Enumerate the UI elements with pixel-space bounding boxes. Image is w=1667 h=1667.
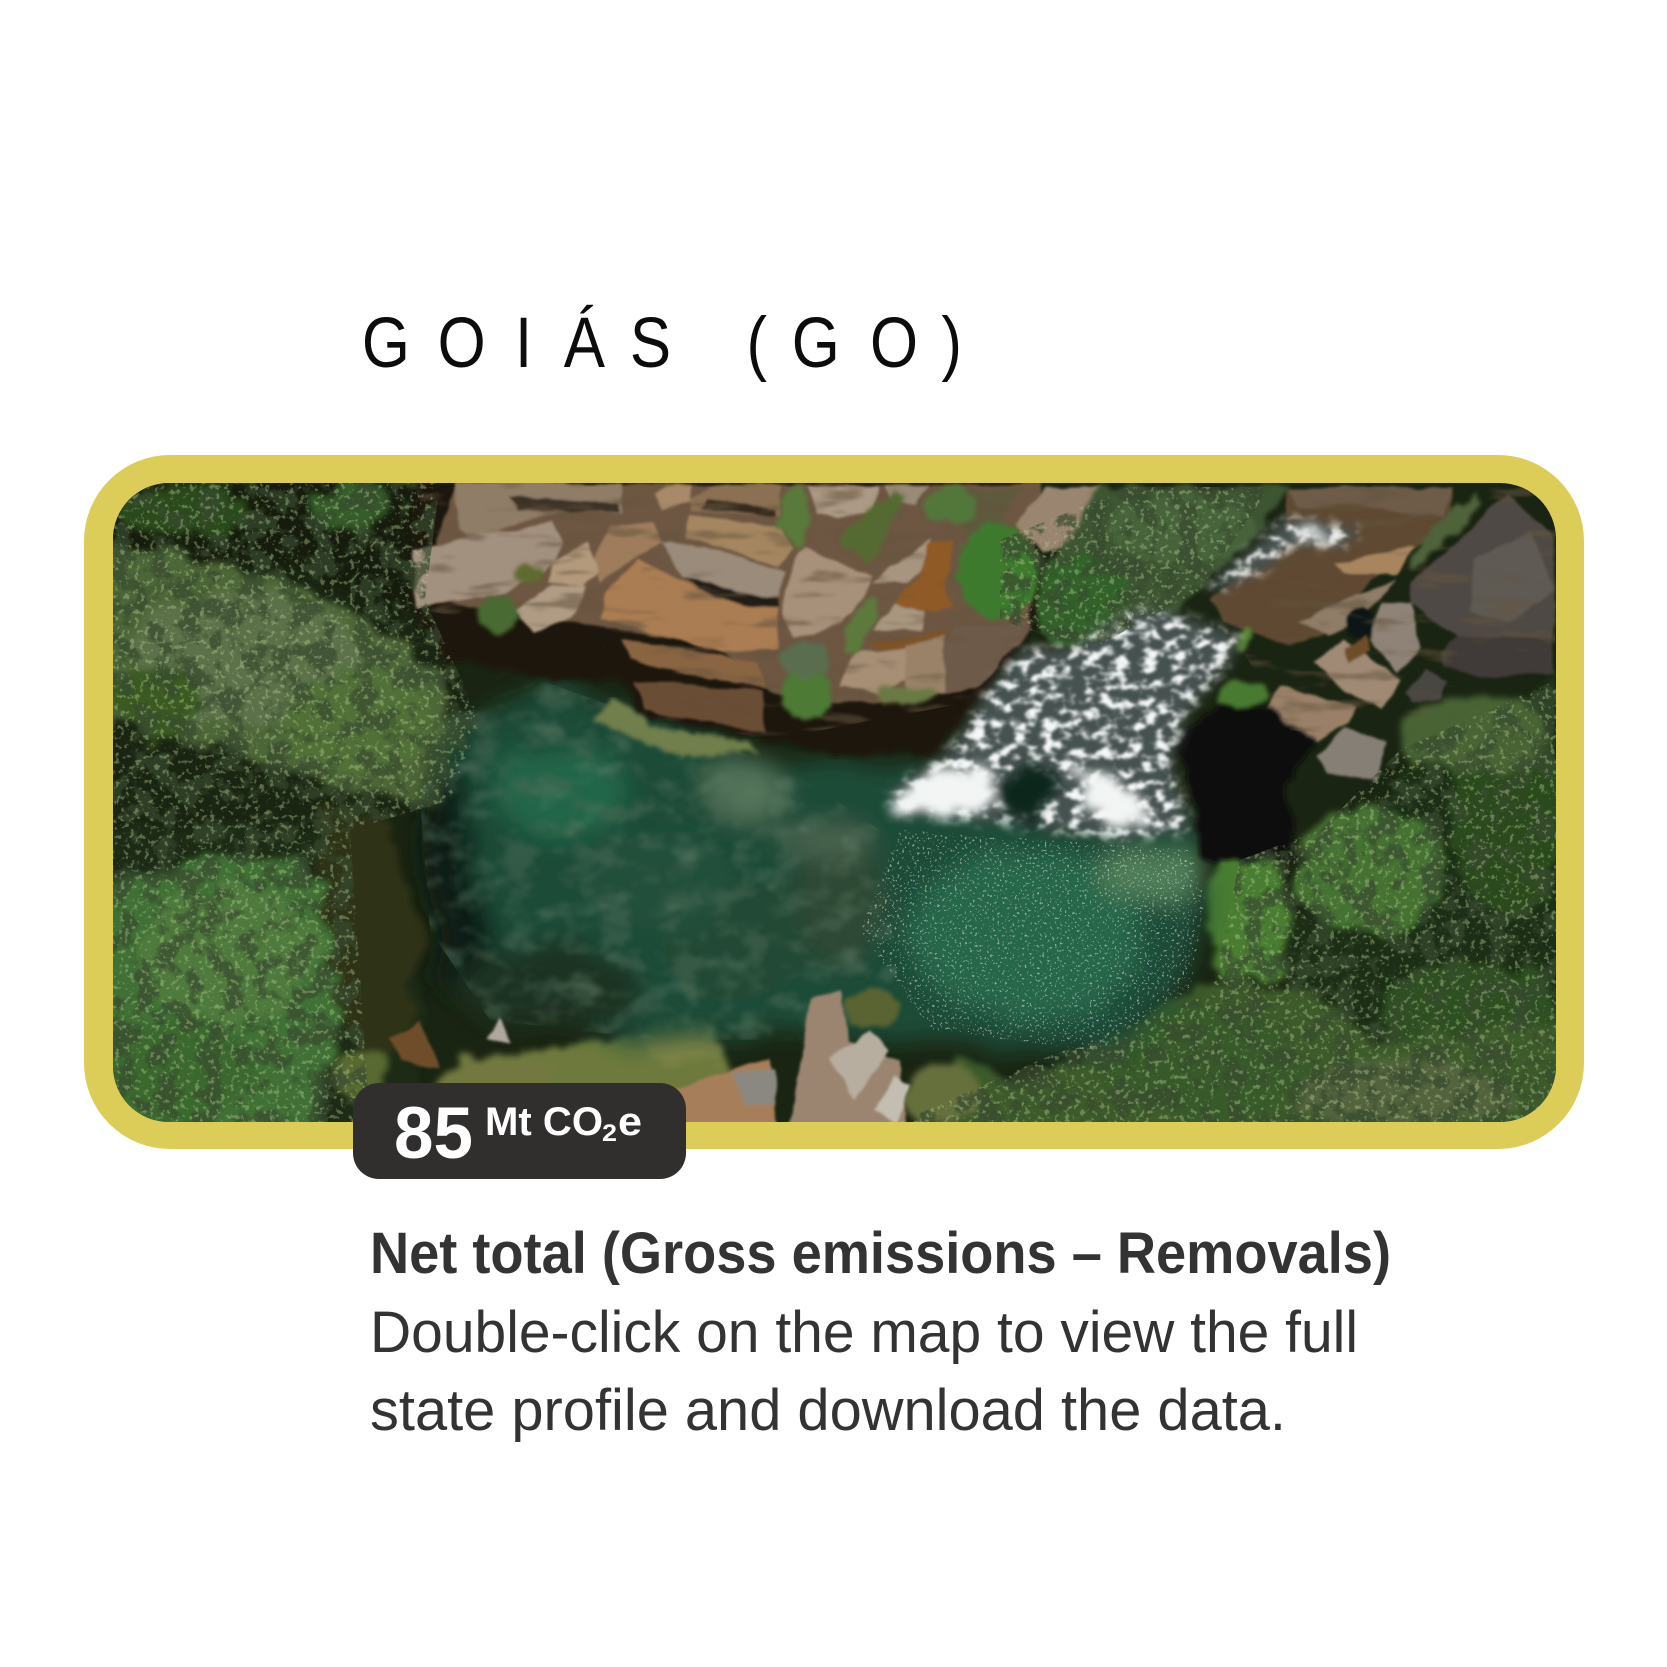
unit: Mt CO2e: Mt CO: [485, 1100, 603, 1144]
foliage speckle: [113, 483, 1556, 1122]
foliage and pool base: [101, 473, 1568, 1137]
description text: [370, 1221, 1391, 1443]
waterfall: [881, 510, 1363, 846]
body line 2: state profile and download the data.: [370, 1378, 1286, 1443]
right rocks: [1211, 487, 1452, 647]
body line 1: Double-click on the map to view the full: [370, 1300, 1358, 1365]
bushes on cliff: [477, 485, 1484, 1026]
pool water: [420, 680, 1207, 1052]
cliff shadow: [410, 483, 1040, 755]
rock cracks: [400, 483, 1560, 753]
white cascades: [895, 530, 1340, 828]
panel: photo frame: [84, 455, 1584, 1149]
cliff rocks: [390, 483, 1555, 1130]
title: GOIÁS (GO): [0, 304, 962, 383]
bottom rocks: [790, 990, 905, 1130]
unit: Mt CO2e: 2: [602, 1120, 617, 1147]
mossy rock in pool: [592, 700, 757, 757]
photo: waterfall and pool from above: [101, 473, 1568, 1137]
dark overhang: [1175, 707, 1314, 860]
water sparkle: [862, 830, 1205, 1050]
bold heading line: Net total (Gross emissions – Removals): [370, 1221, 1391, 1286]
cliff rock mass: [420, 484, 1040, 705]
value: 85: 85: [394, 1093, 473, 1174]
value badge: [353, 1083, 686, 1179]
pool bottom texture: [420, 680, 900, 1040]
unit: Mt CO2e: e: [618, 1100, 642, 1144]
